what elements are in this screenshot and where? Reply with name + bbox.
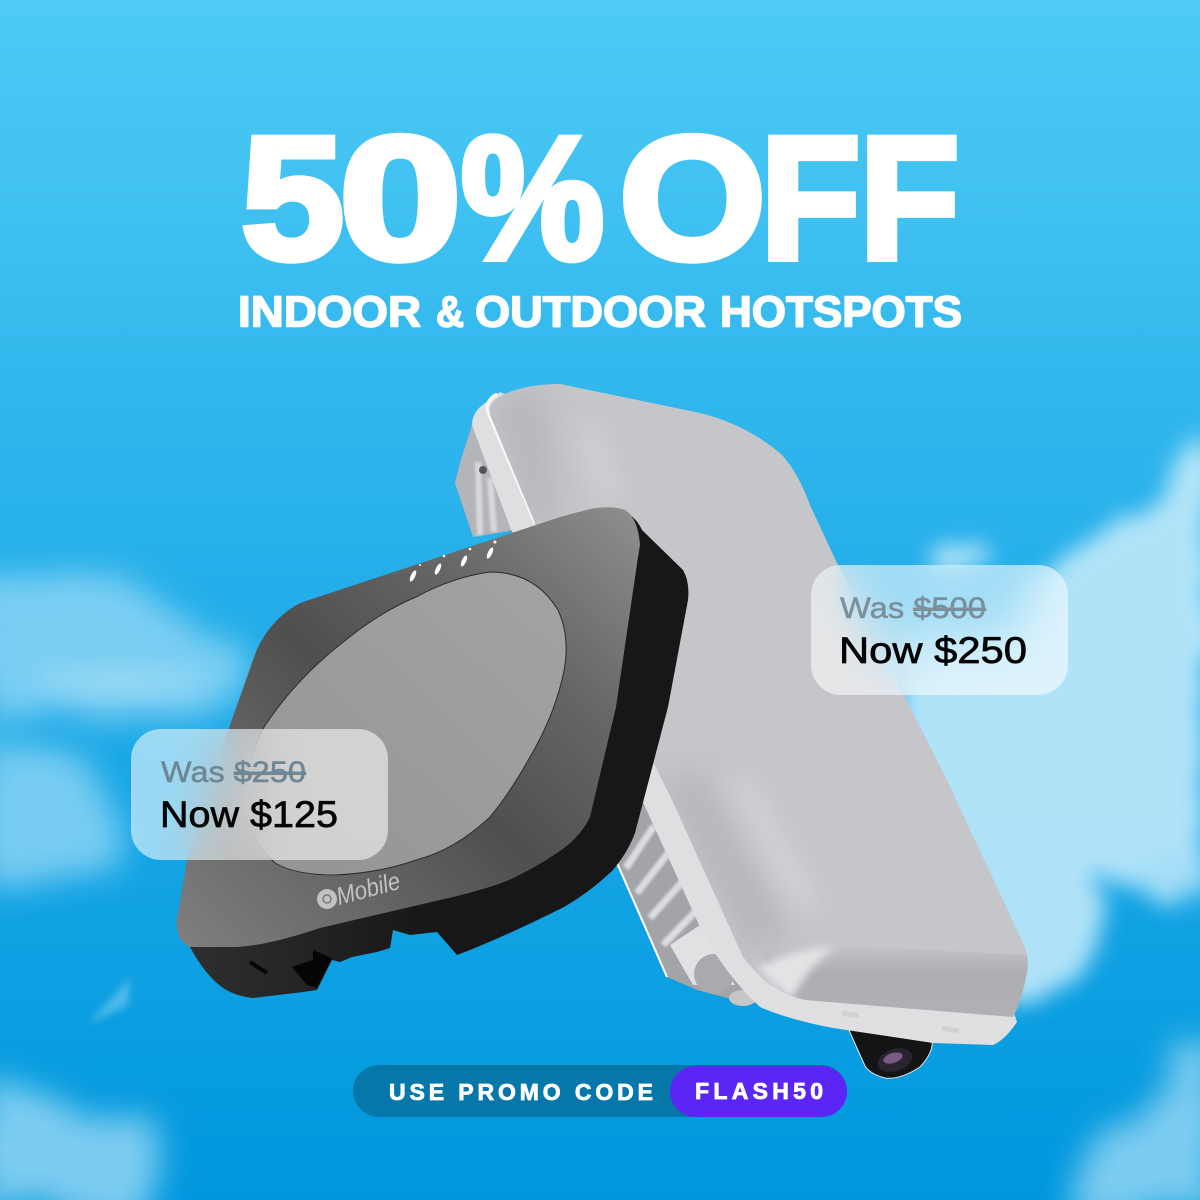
price badge: indoor [131, 729, 388, 860]
logo: Mobile [333, 867, 403, 911]
subtitle [238, 288, 962, 336]
lid [490, 384, 1028, 1017]
outdoor hotspot device [455, 384, 1035, 1078]
price badge: outdoor [811, 565, 1068, 695]
flange highlight [487, 394, 535, 523]
new price: Now $250 [839, 630, 1027, 671]
disc [244, 572, 566, 875]
promo label: USE PROMO CODE [389, 1079, 653, 1105]
promo code: FLASH50 [695, 1078, 823, 1104]
title: % [461, 100, 604, 296]
LED indicators [408, 540, 496, 582]
clips [842, 1011, 959, 1033]
port [250, 962, 267, 973]
subtitle: & [436, 288, 464, 336]
subtitle: OUTDOOR [475, 288, 706, 336]
cable connector [848, 1028, 932, 1078]
old price: Was $500 [840, 592, 986, 625]
flange [472, 392, 1017, 1045]
subtitle: HOTSPOTS [720, 288, 962, 336]
top surface [177, 507, 640, 947]
code background [670, 1066, 847, 1117]
title: F [860, 100, 959, 296]
title: 5 [241, 101, 344, 296]
cooling fins upper [455, 425, 515, 537]
old price: Was $250 [161, 756, 306, 789]
black side [190, 509, 688, 998]
ethernet socket [292, 950, 332, 988]
lid shading [490, 385, 1035, 1025]
subtitle: INDOOR [238, 288, 421, 336]
clouds right [900, 425, 1200, 1005]
heading block [238, 100, 962, 336]
clouds left [0, 570, 250, 890]
title: F [760, 100, 860, 296]
title [241, 100, 959, 296]
pill background [353, 1065, 847, 1117]
cooling fins lower [617, 795, 770, 1006]
title: O [619, 100, 766, 296]
logo [314, 867, 403, 916]
clouds bottom [0, 978, 1200, 1200]
title: 0 [339, 101, 462, 296]
indoor hotspot device [177, 507, 688, 998]
new price: Now $125 [160, 794, 338, 835]
